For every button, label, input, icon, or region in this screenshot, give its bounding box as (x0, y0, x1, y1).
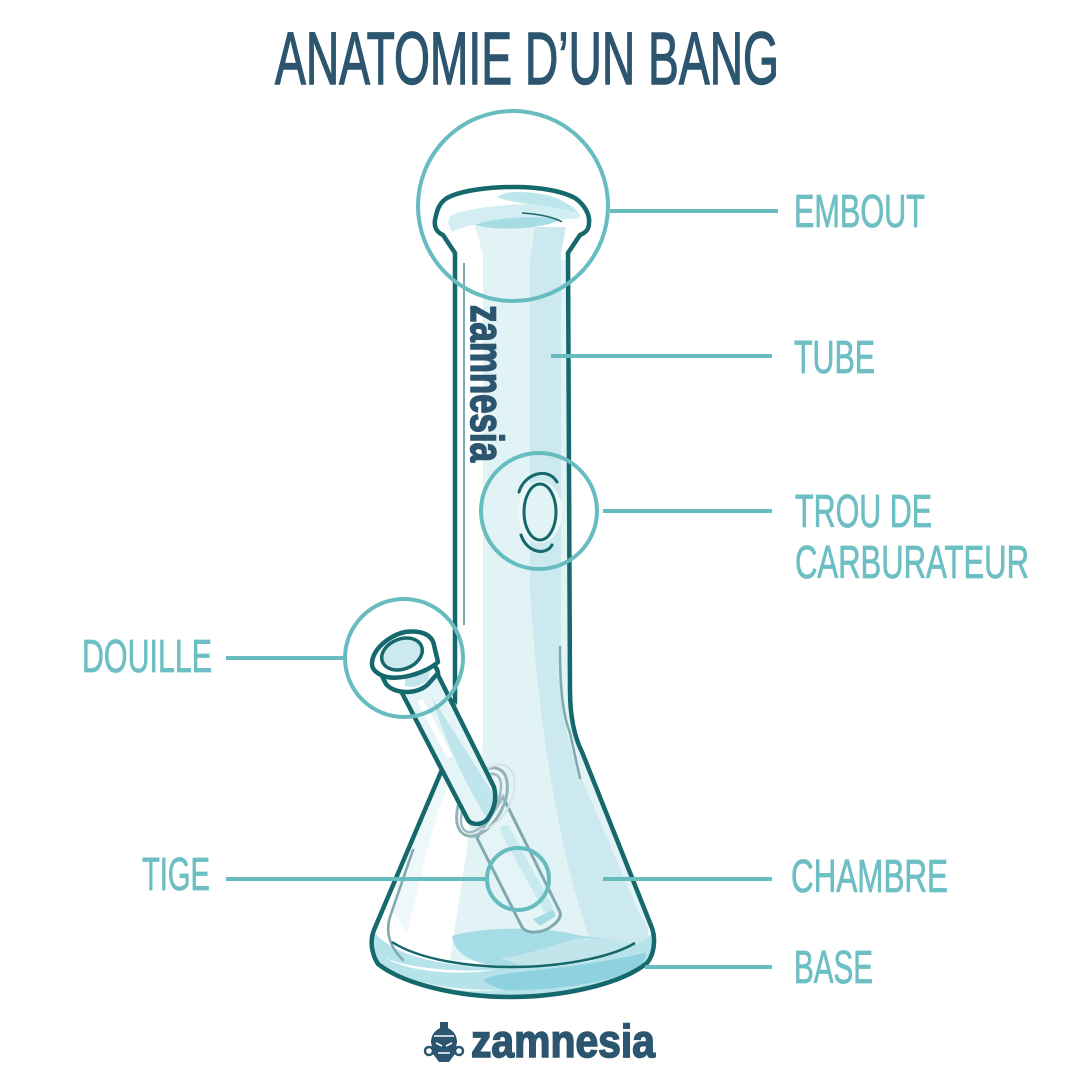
callout circle: douille (345, 599, 463, 717)
bowl collar tint (405, 664, 432, 687)
lower stem end water (533, 910, 556, 926)
callout circle: trou de carburateur (481, 453, 597, 569)
lip inner line (522, 213, 562, 222)
lip lower water (475, 217, 560, 229)
tube darker band (530, 227, 648, 962)
base highlight (385, 958, 495, 973)
inner tube line (463, 263, 465, 625)
base darker shade (483, 953, 646, 990)
body outline (372, 187, 654, 997)
leader: base (645, 965, 772, 969)
footer logo (425, 1015, 655, 1067)
leader: embout (610, 209, 778, 213)
lip upper shade (497, 192, 577, 213)
leader: trou (603, 509, 772, 513)
inner left chamber line (388, 850, 413, 960)
bowl opening (377, 632, 427, 676)
tube light band (450, 226, 649, 960)
bowl rim (372, 632, 438, 678)
label: tige: TIGE (142, 848, 210, 900)
logo wordmark: zamnesia (471, 1015, 655, 1067)
bowl collar (378, 657, 438, 692)
left chamber tint (390, 768, 452, 933)
base rim line (392, 942, 635, 967)
tube logo: zamnesia (461, 305, 513, 462)
water in chamber (452, 929, 636, 967)
bang illustration (372, 187, 654, 997)
leader: tube (551, 354, 772, 358)
inner right shoulder line (560, 647, 580, 778)
lower stem (inside water) (477, 797, 560, 932)
base glass band (372, 932, 654, 996)
leader: chambre (603, 877, 772, 881)
label: tube: TUBE (794, 331, 875, 383)
lower stem streak (505, 830, 548, 908)
label: embout: EMBOUT (794, 185, 925, 237)
base lower highlight (388, 972, 505, 991)
upper stem outline (402, 675, 495, 824)
upper stem streak (432, 697, 493, 818)
callout circle: embout (418, 111, 608, 301)
label: trou de carburateur (795, 485, 1029, 588)
percolator ring (446, 759, 518, 845)
leader: douille (226, 656, 345, 660)
label: douille: DOUILLE (82, 630, 212, 682)
title: ANATOMIE D’UN BANG (275, 17, 779, 100)
label: trou de carburateur: TROU DE (795, 485, 932, 537)
water lighter wave (500, 938, 634, 967)
upper stem highlight (420, 700, 450, 757)
glass body fill (372, 187, 654, 997)
icon: tribal mask (425, 1022, 463, 1062)
label: base: BASE (794, 941, 873, 993)
hidden tube edge behind stem (443, 703, 455, 760)
lip band fill (448, 204, 580, 232)
leader: tige (226, 877, 487, 881)
upper stem (402, 675, 495, 824)
label: chambre: CHAMBRE (791, 850, 948, 902)
callout circle: tige (487, 848, 549, 910)
carb hole (518, 473, 562, 551)
